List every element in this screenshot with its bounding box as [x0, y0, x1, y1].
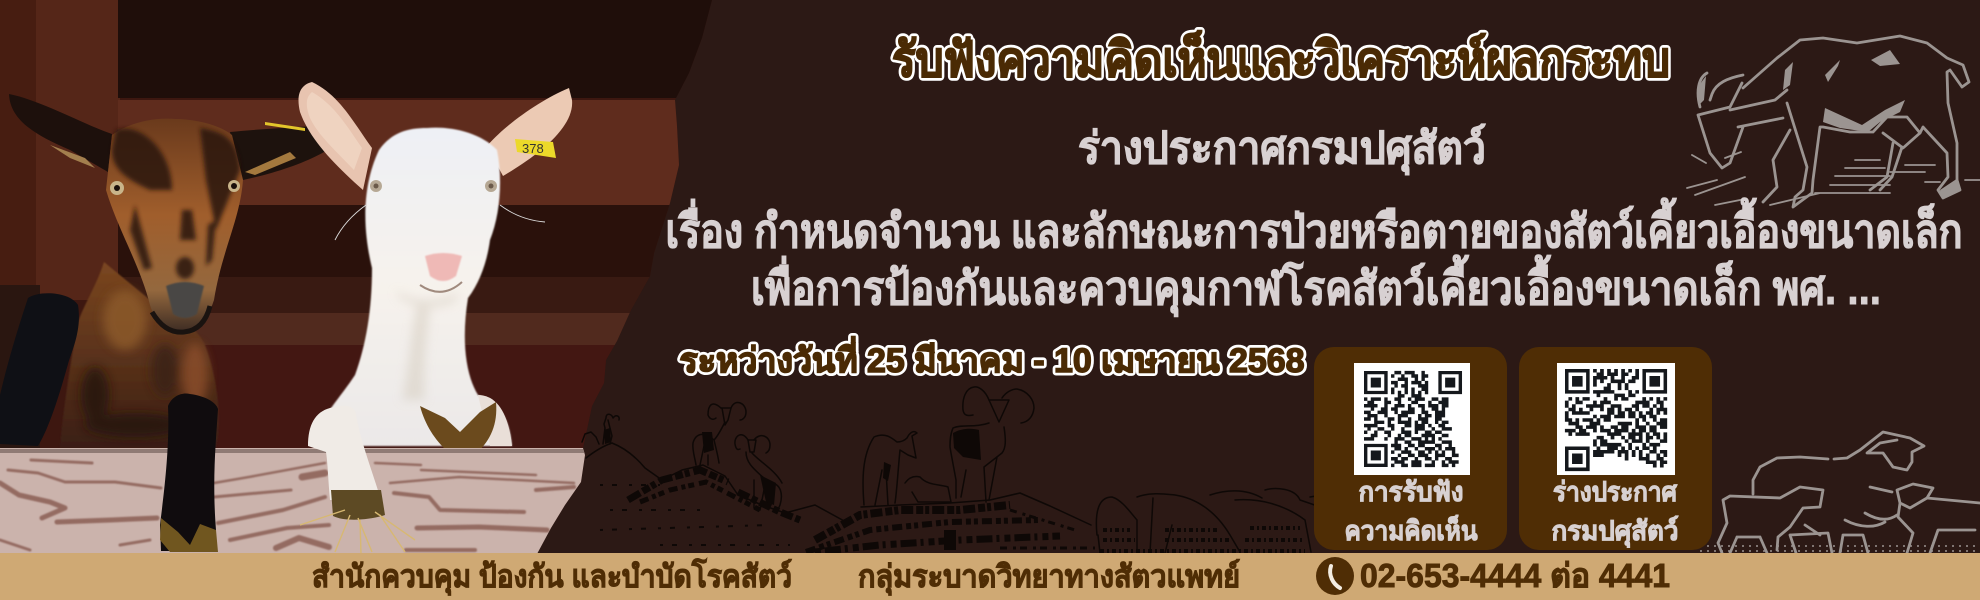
icon: phone	[1316, 557, 1354, 595]
QR code 2	[1557, 363, 1675, 475]
subtitle: ร่างประกาศกรมปศุสัตว์	[1078, 123, 1486, 176]
panel: QR public hearing	[1314, 347, 1507, 550]
footer band	[0, 553, 1980, 600]
white front leg and hoof	[300, 406, 415, 554]
QR 1 label	[1344, 477, 1478, 546]
title: รับฟังความคิดเห็นและวิเคราะห์ผลกระทบ	[892, 30, 1670, 87]
brown goat	[9, 94, 349, 448]
large ram	[950, 387, 1034, 502]
bureau name: สำนักควบคุม ป้องกัน และบำบัดโรคสัตว์	[312, 558, 792, 596]
panel: QR draft announcement	[1519, 347, 1712, 550]
group name: กลุ่มระบาดวิทยาทางสัตวแพทย์	[858, 559, 1240, 596]
date range: ระหว่างวันที่ 25 มีนาคม - 10 เมษายน 2568	[680, 336, 1304, 380]
date range: ระหว่างวันที่ 25 มีนาคม - 10 เมษายน 2568	[680, 336, 1304, 380]
QR 1 label: ความคิดเห็น	[1344, 513, 1478, 546]
illustration: sheep family	[1700, 432, 1980, 553]
title: รับฟังความคิดเห็นและวิเคราะห์ผลกระทบ	[892, 30, 1670, 87]
white goat	[298, 82, 572, 452]
phone number: 02-653-4444 ต่อ 4441	[1360, 557, 1670, 594]
hills	[586, 443, 1095, 553]
illustration: grazing goat	[1687, 36, 1980, 207]
black front leg and hoof	[160, 394, 218, 552]
QR 2 label: กรมปศุสัตว์	[1552, 515, 1678, 548]
white goat: 378	[522, 141, 544, 156]
ram with curled horns	[693, 402, 782, 512]
QR 1 label: การรับฟัง	[1358, 477, 1464, 507]
silhouette: rams on hills	[582, 387, 1335, 553]
fence plank	[0, 448, 600, 554]
photo: two goats at a barn fence	[0, 0, 720, 560]
QR 2 label	[1552, 477, 1678, 548]
flock of sheep	[1096, 489, 1335, 553]
ewe and lamb	[863, 432, 951, 505]
black back leg of brown goat	[0, 293, 79, 446]
barn wall	[0, 0, 712, 448]
QR 2 label: ร่างประกาศ	[1553, 477, 1678, 507]
QR code 1	[1354, 363, 1470, 475]
small rams far left	[582, 414, 619, 444]
